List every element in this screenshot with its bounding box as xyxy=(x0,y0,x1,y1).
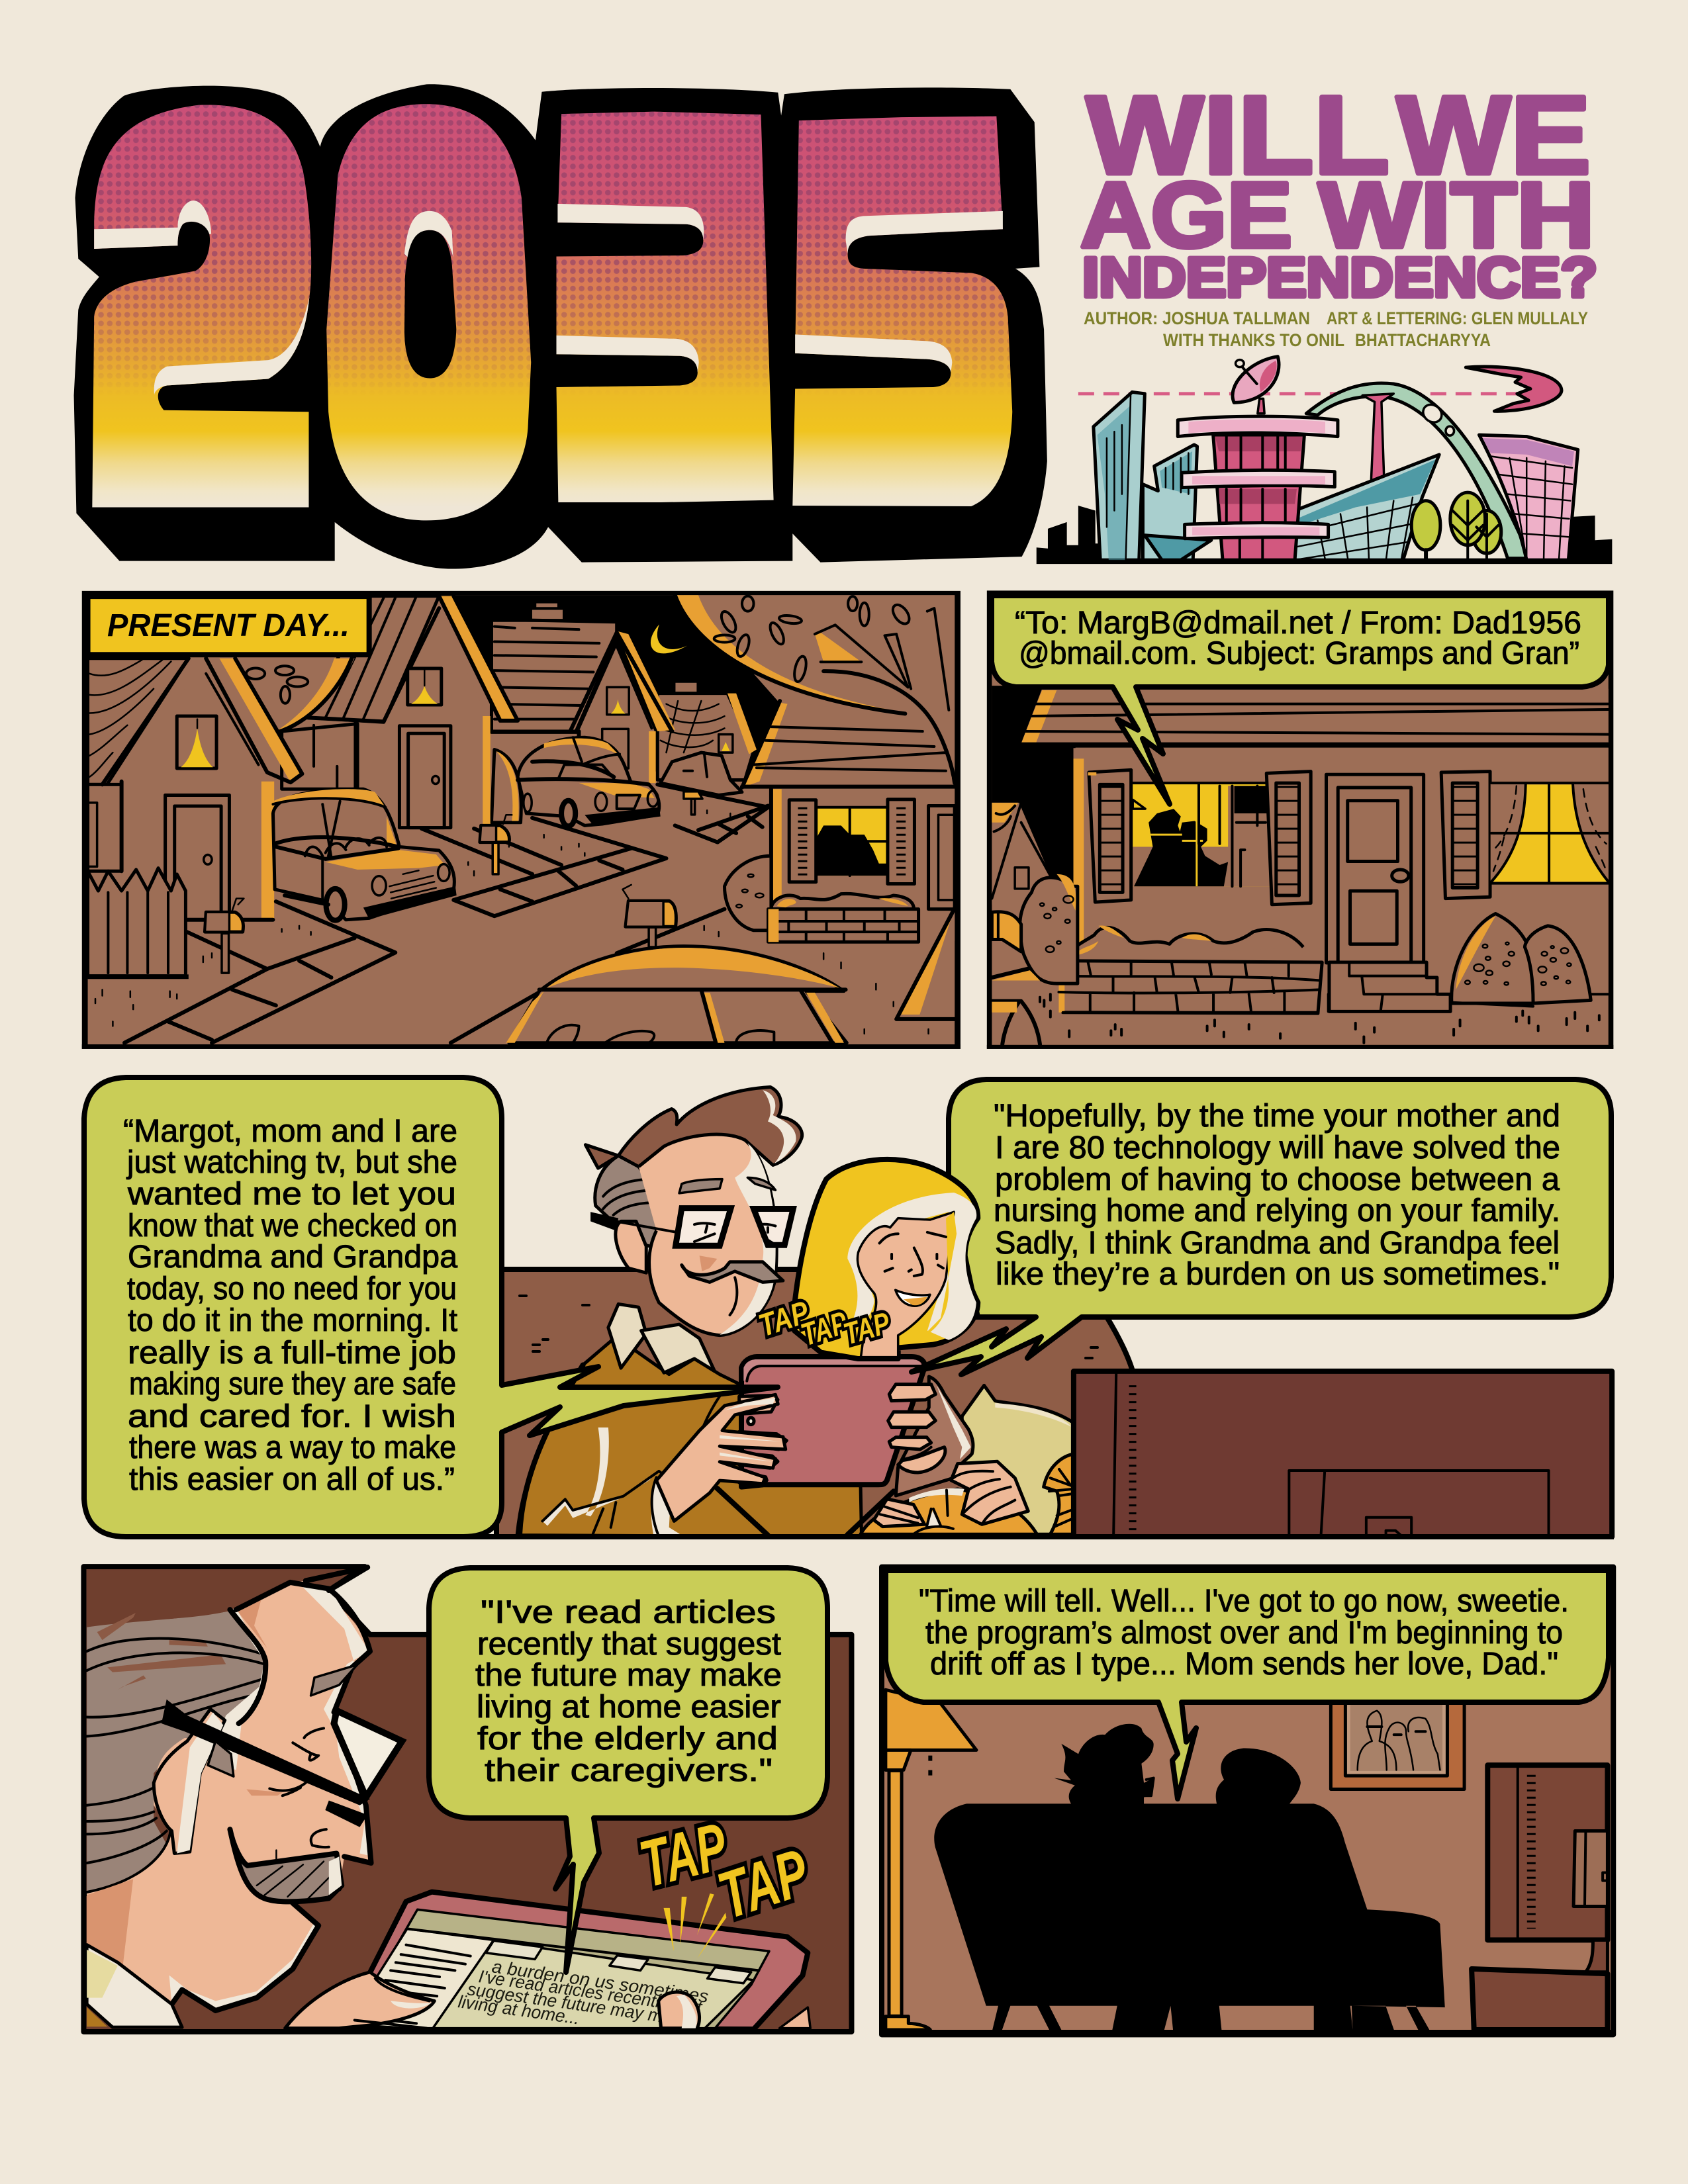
planter shrubs and bricks xyxy=(1058,925,1322,1013)
foreground car roof xyxy=(506,946,847,1043)
heading: will we age with independence: AGE xyxy=(1080,163,1292,267)
speech bubble: goodnight xyxy=(886,1570,1609,1799)
tap sound effect: TAP xyxy=(633,1809,735,1901)
tablet tap sound: small: TAP xyxy=(839,1305,894,1351)
tablet screen text xyxy=(457,1956,710,2030)
television back xyxy=(1074,1371,1612,1537)
bush highlight xyxy=(496,751,519,821)
left bubble text: today, so no need for you xyxy=(127,1271,457,1306)
building: pink grid dome xyxy=(1479,435,1578,560)
bottom border xyxy=(987,1045,1613,1049)
right bubble text xyxy=(994,1099,1560,1292)
right bubble text: I are 80 technology will have solved the xyxy=(995,1130,1560,1165)
caption box xyxy=(88,596,369,655)
building: central tower xyxy=(1178,398,1338,560)
heading: will we age with independence: WITH xyxy=(1319,163,1595,267)
jacket line xyxy=(847,1491,894,1535)
tablet tap sound: small: TAP xyxy=(755,1295,814,1343)
right bubble text: nursing home and relying on your family. xyxy=(994,1193,1560,1228)
panel: present day street scene xyxy=(82,591,961,1049)
left bubble text: know that we checked on xyxy=(128,1208,457,1244)
tablet xyxy=(342,1892,808,2029)
speech bubble text: their caregivers." xyxy=(485,1753,773,1788)
tree foliage xyxy=(675,595,955,783)
caption text: PRESENT DAY... xyxy=(107,608,350,643)
tablet screen text: living at home... xyxy=(457,1991,581,2028)
credits: BHATTACHARYYA xyxy=(1355,330,1491,350)
mom's hand xyxy=(888,1377,973,1496)
glasses xyxy=(162,1700,402,1827)
dad's head xyxy=(585,1087,802,1336)
speech bubble text: drift off as I type... Mom sends her love, Dad." xyxy=(930,1647,1558,1682)
night sky xyxy=(439,595,788,780)
speech bubble: mom, right xyxy=(912,1079,1611,1375)
panel: silhouette on sofa xyxy=(882,1567,1613,2034)
curtained window xyxy=(1491,783,1609,884)
framed family picture xyxy=(1331,1700,1464,1790)
dad's jacket xyxy=(517,1304,862,1537)
building: arch xyxy=(1306,383,1530,559)
shutters and door xyxy=(1088,770,1490,963)
speech bubble text: "Time will tell. Well... I've got to go now, sweetie. xyxy=(919,1584,1569,1619)
tap sound effect: TAP xyxy=(710,1835,818,1933)
night gap xyxy=(992,686,1076,889)
television and stand xyxy=(1472,1765,1607,2030)
icon: crescent moon xyxy=(651,624,687,653)
credits: ART & LETTERING: GLEN MULLALY xyxy=(1327,308,1588,328)
brows xyxy=(679,1179,722,1193)
brow xyxy=(311,1664,357,1696)
porch steps xyxy=(1329,962,1450,1011)
left bubble text: just watching tv, but she xyxy=(126,1145,457,1180)
mom's head xyxy=(794,1160,978,1359)
email header text: “To: MargB@dmail.net / From: Dad1956 xyxy=(1015,606,1581,641)
heading: will we age with independence: WE xyxy=(1397,73,1591,197)
left bubble text: to do it in the morning. It xyxy=(128,1303,457,1338)
cat on lap xyxy=(962,1385,1077,1534)
heading: will we age with independence: WILL xyxy=(1086,73,1389,197)
speech bubble: email header xyxy=(992,596,1609,804)
right house with lit window xyxy=(742,701,955,941)
right bubble text: Sadly, I think Grandma and Grandpa feel xyxy=(995,1226,1560,1261)
illustration: retro-future skyline xyxy=(1037,357,1612,564)
ground line and grass xyxy=(1040,994,1609,1043)
car: front driveway xyxy=(273,789,457,921)
hair xyxy=(618,1087,802,1167)
panel background xyxy=(83,1567,851,2032)
heading: will we age with independence: INDEPENDENCE? xyxy=(1082,246,1597,308)
glasses xyxy=(676,1208,793,1246)
title: 2035 lettering xyxy=(74,84,1047,569)
tablet screen text: suggest the future may make xyxy=(466,1979,692,2030)
collar xyxy=(87,1945,182,2027)
heading: will we age with independence xyxy=(1080,73,1597,308)
icon: satellite dish xyxy=(1233,357,1279,402)
lit window with silhouettes xyxy=(1132,783,1270,886)
cream bevel bands and counter xyxy=(94,201,1003,395)
tablet screen text: I've read articles recently that xyxy=(477,1966,704,2017)
tablet tap sound: small xyxy=(755,1295,894,1353)
speech bubble text: recently that suggest xyxy=(477,1627,781,1662)
round bushes xyxy=(1452,914,1591,1003)
email header text xyxy=(1015,606,1581,671)
bush between houses xyxy=(232,659,355,733)
shirt collar xyxy=(608,1304,646,1368)
tap sound effect xyxy=(633,1809,818,1933)
speech bubble text: the program’s almost over and I'm beginning to xyxy=(925,1615,1563,1651)
left bush and car xyxy=(992,874,1078,1044)
sofa stitching xyxy=(520,1296,1099,1377)
left bubble text: wanted me to let you xyxy=(127,1177,456,1212)
moustache xyxy=(682,1262,783,1282)
tablet screen text: a burden on us sometimes xyxy=(491,1956,710,2007)
hedge bush xyxy=(725,856,771,931)
fingers on tablet xyxy=(81,1972,853,2034)
picket fence xyxy=(88,868,185,976)
speech bubble text: the future may make xyxy=(475,1658,782,1693)
panel: dad typing close-up xyxy=(81,1567,853,2034)
speech bubble text: living at home easier xyxy=(477,1690,781,1725)
tablet from behind xyxy=(739,1357,1074,1535)
speech bubble text xyxy=(475,1595,782,1788)
sofa xyxy=(496,1269,1133,1537)
roof xyxy=(1021,689,1609,745)
email header text: @bmail.com. Subject: Gramps and Gran” xyxy=(1019,636,1579,671)
sidewalks and road edges xyxy=(124,784,769,1043)
building: swoop xyxy=(1295,455,1439,560)
wall xyxy=(1074,748,1609,994)
grass ticks xyxy=(95,810,929,1034)
icon: crescent spaceship xyxy=(1466,367,1562,411)
gable house xyxy=(491,631,675,783)
tablet tap sound: small: TAP xyxy=(797,1305,853,1353)
panel: couple on the sofa xyxy=(84,1077,1614,1539)
face xyxy=(639,1134,776,1336)
planter with shrub xyxy=(769,893,919,942)
front house xyxy=(88,659,302,920)
dad's fingers on tablet xyxy=(739,1395,786,1486)
distant house with tile roof xyxy=(486,602,620,731)
speech bubble text: for the elderly and xyxy=(477,1721,778,1756)
left bubble text: this easier on all of us.” xyxy=(129,1462,455,1497)
orange cat and hands xyxy=(861,1454,1074,1534)
mailboxes xyxy=(205,792,702,973)
left bubble text: there was a way to make xyxy=(129,1430,456,1465)
car: mid driveway xyxy=(518,737,661,826)
floor lamp xyxy=(886,1690,976,2030)
left bubble text xyxy=(123,1114,457,1497)
neighbor house xyxy=(992,803,1051,905)
tree trunk xyxy=(896,907,955,1020)
speech bubble text: "I've read articles xyxy=(481,1595,776,1630)
beard xyxy=(230,1829,342,1901)
spire xyxy=(1362,394,1393,488)
face and neck xyxy=(87,1567,373,2011)
right bubble text: problem of having to choose between a xyxy=(995,1162,1560,1197)
car: far right xyxy=(661,752,742,795)
far right house xyxy=(657,681,757,780)
left bubble text: really is a full-time job xyxy=(128,1336,456,1371)
credits: WITH THANKS TO ONIL xyxy=(1163,330,1344,350)
panel bottom edge xyxy=(424,1534,1614,1539)
face xyxy=(857,1212,954,1357)
left bubble text: “Margot, mom and I are xyxy=(123,1114,457,1149)
left bubble text: and cared for. I wish xyxy=(128,1399,456,1434)
speech bubble text xyxy=(919,1584,1569,1682)
ear xyxy=(154,1709,225,1853)
bush beside driveway xyxy=(491,750,521,823)
panel: house exterior with email speech bubble xyxy=(987,590,1613,1049)
ear xyxy=(616,1221,646,1273)
hair xyxy=(87,1571,329,1893)
dad's hand on tablet xyxy=(657,1394,786,1521)
right bubble text: like they’re a burden on us sometimes." xyxy=(996,1257,1560,1292)
tree cluster xyxy=(1411,492,1501,560)
left bubble text: Grandma and Grandpa xyxy=(128,1240,457,1275)
black extruded outline xyxy=(74,84,1047,569)
right bubble text: "Hopefully, by the time your mother and xyxy=(994,1099,1560,1134)
building: teal tower xyxy=(1094,392,1211,560)
left bubble text: making sure they are safe xyxy=(129,1367,456,1402)
speech bubble: dad, left xyxy=(84,1077,778,1537)
credits xyxy=(1084,308,1588,350)
speech bubble: dad's thought xyxy=(429,1568,827,1972)
bottom border xyxy=(82,1044,961,1049)
credits: AUTHOR: JOSHUA TALLMAN xyxy=(1084,308,1310,328)
silhouette: sofa and couple xyxy=(934,1724,1445,2030)
center house xyxy=(282,596,518,829)
